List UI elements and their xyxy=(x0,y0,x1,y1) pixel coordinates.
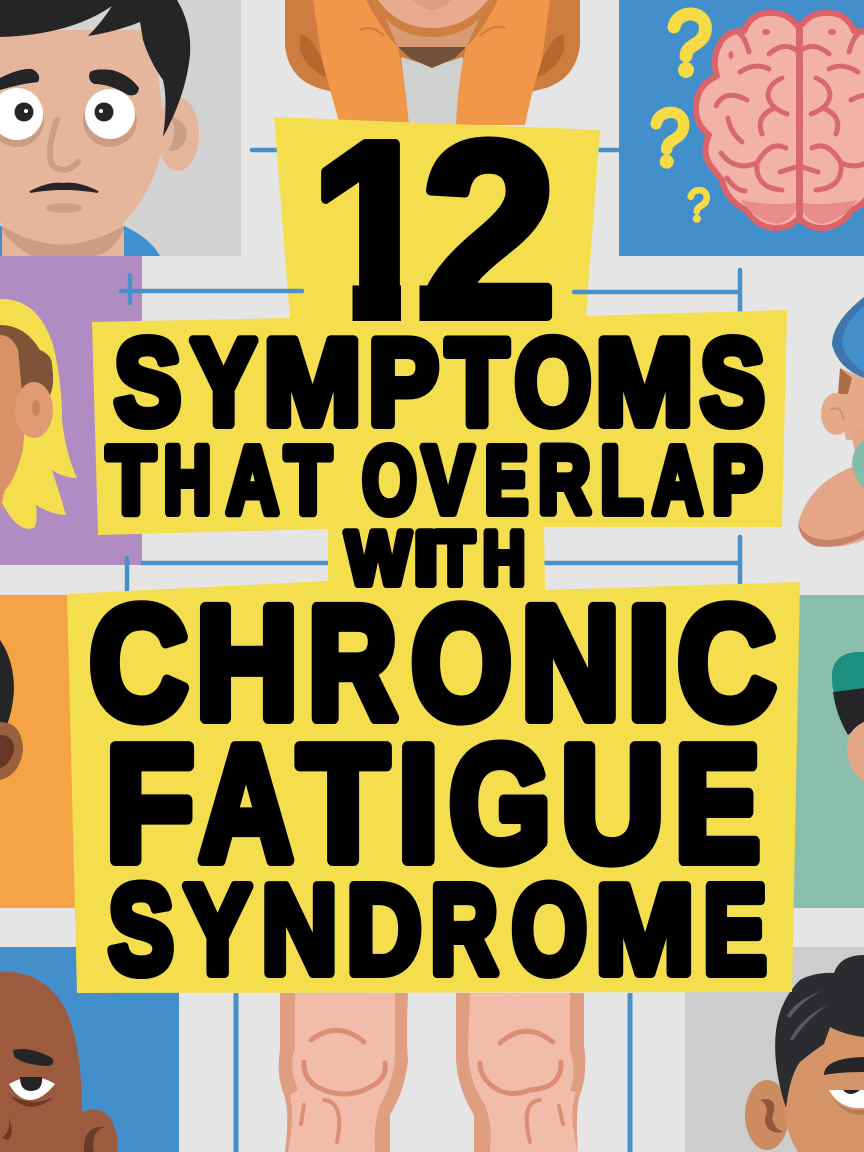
title line: SYMPTOMS: O xyxy=(515,314,591,450)
title line: FATIGUE: T xyxy=(298,712,388,895)
panel: teal background person xyxy=(790,595,864,908)
title line: SYNDROME: E xyxy=(703,858,767,1000)
panel: orange background person xyxy=(0,595,76,908)
title line: FATIGUE: A xyxy=(199,712,293,895)
title number 12 xyxy=(304,90,557,369)
panel: man with drooping eyes on grey xyxy=(685,947,864,1152)
title line: SYMPTOMS: Y xyxy=(191,314,256,450)
title line: SYNDROME: Y xyxy=(184,858,251,1000)
title line: WITH: W xyxy=(346,517,411,601)
title line: THAT OVERLAP: H xyxy=(164,428,211,534)
connector lines behind title xyxy=(127,150,740,1152)
title line: THAT OVERLAP: T xyxy=(285,428,331,534)
title line: CHRONIC: C xyxy=(678,573,776,752)
title line: FATIGUE: G xyxy=(449,712,551,895)
panel: tired man with wide eyes xyxy=(0,0,241,256)
title line: WITH: T xyxy=(436,517,474,601)
title line: THAT OVERLAP: A xyxy=(652,428,702,534)
connector lines over title backing xyxy=(121,291,740,292)
title line: CHRONIC: R xyxy=(308,573,397,752)
panel: man with blue cap and neck pain xyxy=(798,297,864,547)
panel: brain with question marks xyxy=(619,0,864,256)
title line: SYNDROME: D xyxy=(346,858,422,1000)
title line: SYMPTOMS: P xyxy=(368,314,439,450)
title backing shape xyxy=(67,117,800,993)
title line: WITH: H xyxy=(483,517,525,601)
icon: brain xyxy=(696,13,864,228)
title line: CHRONIC: C xyxy=(90,573,188,752)
title line: SYMPTOMS: M xyxy=(264,314,361,450)
title line: SYNDROME: N xyxy=(261,858,338,1000)
panel: woman with yellow hair xyxy=(0,256,142,565)
title xyxy=(90,90,776,1000)
title line: THAT OVERLAP: L xyxy=(600,428,643,534)
title line: SYMPTOMS: T xyxy=(446,314,508,450)
title line: THAT OVERLAP: O xyxy=(362,428,416,534)
title line: FATIGUE: U xyxy=(561,712,664,895)
title line: THAT OVERLAP: E xyxy=(485,428,528,534)
figure: right knee xyxy=(456,993,585,1152)
title number 12: 2 xyxy=(421,90,557,369)
title line: SYNDROME: M xyxy=(595,858,694,1000)
title line: CHRONIC: H xyxy=(196,573,298,752)
title line: FATIGUE: F xyxy=(106,712,194,895)
title line: THAT OVERLAP: A xyxy=(226,428,278,534)
figure: left knee xyxy=(279,993,408,1152)
title line: SYNDROME: S xyxy=(108,858,174,1000)
title line: WITH: I xyxy=(414,517,438,601)
figure: person holding shoulders xyxy=(285,0,580,125)
title line: THAT OVERLAP: R xyxy=(538,428,590,534)
title line: SYNDROME: O xyxy=(512,858,587,1000)
title line: FATIGUE: E xyxy=(675,712,760,895)
title line: FATIGUE: I xyxy=(398,712,439,895)
title line: SYMPTOMS: M xyxy=(596,314,693,450)
title line: THAT OVERLAP: T xyxy=(107,428,155,534)
panel: man with drooping eyes on blue xyxy=(0,947,179,1152)
icon: question marks xyxy=(656,14,707,223)
title line: SYNDROME: R xyxy=(430,858,498,1000)
title line: CHRONIC: O xyxy=(411,573,512,752)
title line: CHRONIC: N xyxy=(521,573,620,752)
title line: CHRONIC: I xyxy=(627,573,671,752)
title line: THAT OVERLAP: P xyxy=(712,428,762,534)
title line: THAT OVERLAP: V xyxy=(422,428,474,534)
title number 12: 1 xyxy=(310,90,438,369)
title line: SYMPTOMS: S xyxy=(700,314,765,450)
title line: SYMPTOMS: S xyxy=(114,314,181,450)
